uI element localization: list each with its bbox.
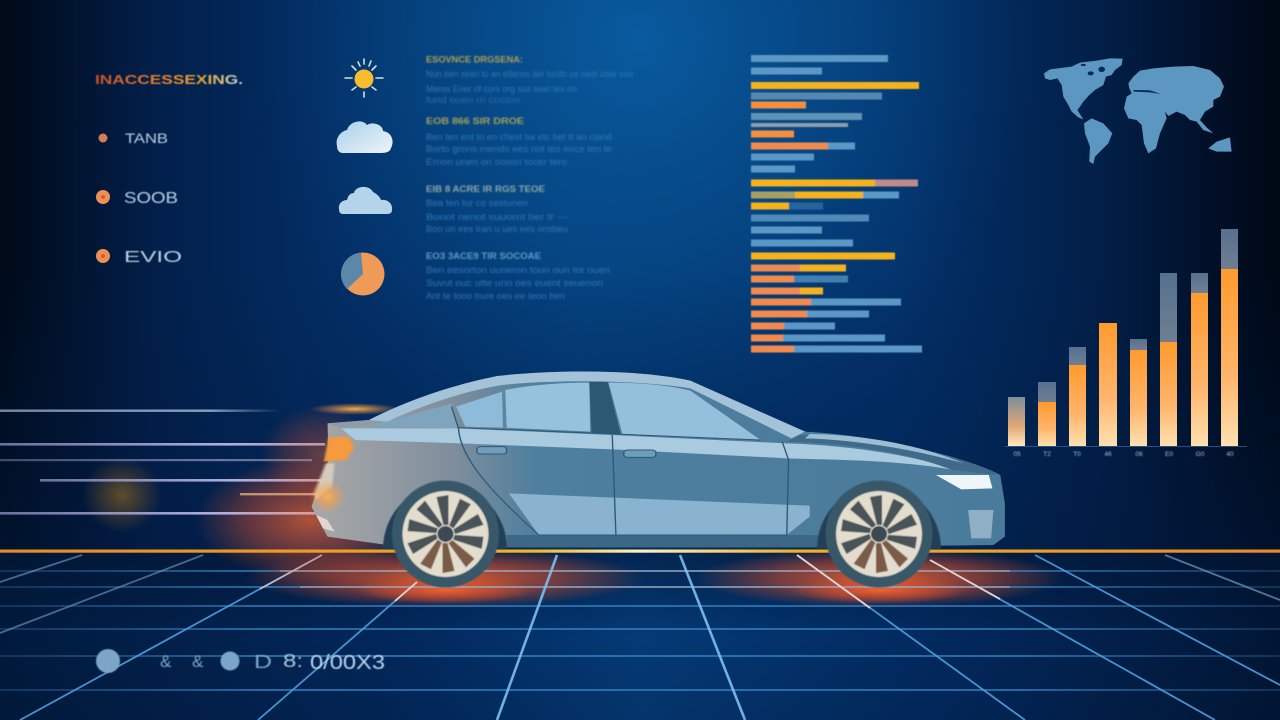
text block 1: Meros Ener of curs org sus tean tes on (426, 84, 577, 94)
text block 1 (426, 54, 633, 105)
horizontal bar chart (751, 55, 922, 352)
legend item: sood: SOOB (124, 190, 178, 207)
column axis labels (1013, 451, 1234, 458)
rear wheel (383, 480, 507, 588)
motion glow and speed lines (0, 403, 425, 582)
text block 4 (426, 251, 610, 301)
car body (309, 371, 1005, 547)
text block 1: Nun ben sean to an ellanos der tunfic ce neet uber cou (426, 69, 633, 79)
text block 2: Borto grons mendo ees not tes ence ten te (426, 144, 612, 154)
bottom status row: 8: (283, 651, 303, 671)
rear bumper highlight (314, 463, 334, 500)
bottom status row: 0/00X3 (310, 652, 385, 674)
bottom status row: & (192, 652, 204, 671)
legend item: evio (96, 249, 182, 266)
legend item: sood (96, 190, 178, 207)
text block 4: Suvut ouc utte unn oes euent seuenon (426, 278, 603, 288)
column axis labels: E0 (1165, 451, 1173, 458)
south america (1084, 118, 1112, 164)
bottom status row: D (254, 652, 272, 672)
map water details (1081, 64, 1161, 94)
front wheel (817, 480, 941, 588)
eurasia and africa (1124, 66, 1224, 153)
legend item: time (98, 130, 168, 146)
legend item: evio: EVIO (124, 249, 182, 266)
text block 3 (426, 184, 568, 234)
sidebar title: INACCESSEXING. (95, 73, 243, 87)
icon: large cloud (337, 121, 393, 153)
text block 4: EO3 3ACE9 TIR SOCOAE (426, 251, 541, 262)
bottom status row (96, 649, 385, 674)
text block 3: Bon un ees tran u ues ees onsbeu (426, 224, 568, 234)
text block 2 (426, 116, 612, 167)
tail light (324, 437, 354, 462)
text block 4: Ben eesorton uuneron toun oun tor ouen (426, 265, 610, 275)
text block 3: Bonot nenot suuornt ber tr --- (426, 212, 568, 222)
rear bumper glow (309, 480, 346, 513)
text block 2: EOB 866 SIR DROE (426, 116, 524, 127)
legend item: time: TANB (125, 130, 168, 146)
column axis labels: G0 (1196, 451, 1205, 458)
icon: small cloud (339, 187, 392, 214)
text block 1: fund ouen rn coston (426, 95, 520, 105)
ground line (0, 550, 1280, 553)
text block 4: Ant te tono trure oes ee teon ben (426, 291, 565, 301)
rear reflector (316, 515, 334, 532)
headlight (936, 475, 992, 489)
fog lamp (968, 510, 993, 538)
column axis labels: 40 (1226, 451, 1234, 458)
icon: pie chart (341, 252, 384, 296)
column axis labels: 46 (1104, 451, 1112, 458)
world map (1044, 58, 1232, 164)
column axis labels: T2 (1043, 451, 1051, 458)
australia (1208, 137, 1232, 152)
column axis labels: 05 (1013, 451, 1021, 458)
door handles (477, 447, 656, 457)
car (309, 371, 1005, 588)
bottom status row: & (160, 652, 172, 671)
text block 3: EIB 8 ACRE IR RGS TEOE (426, 184, 545, 195)
column chart (1005, 229, 1247, 458)
text block 2: Ernon unen on soson tocer tero (426, 157, 567, 167)
background (0, 0, 1280, 552)
text block 2: Ben ten ent tri en chest ba etc bet tt an ctand (426, 132, 612, 142)
north america (1044, 58, 1123, 119)
icon: sun (345, 59, 383, 97)
column axis labels: 06 (1135, 451, 1143, 458)
column axis labels: T0 (1073, 451, 1081, 458)
text block 1: ESOVNCE DRGSENA: (426, 54, 523, 66)
text block 3: Bea ten tur co sestunen (426, 198, 528, 208)
floor grid (0, 548, 1280, 720)
